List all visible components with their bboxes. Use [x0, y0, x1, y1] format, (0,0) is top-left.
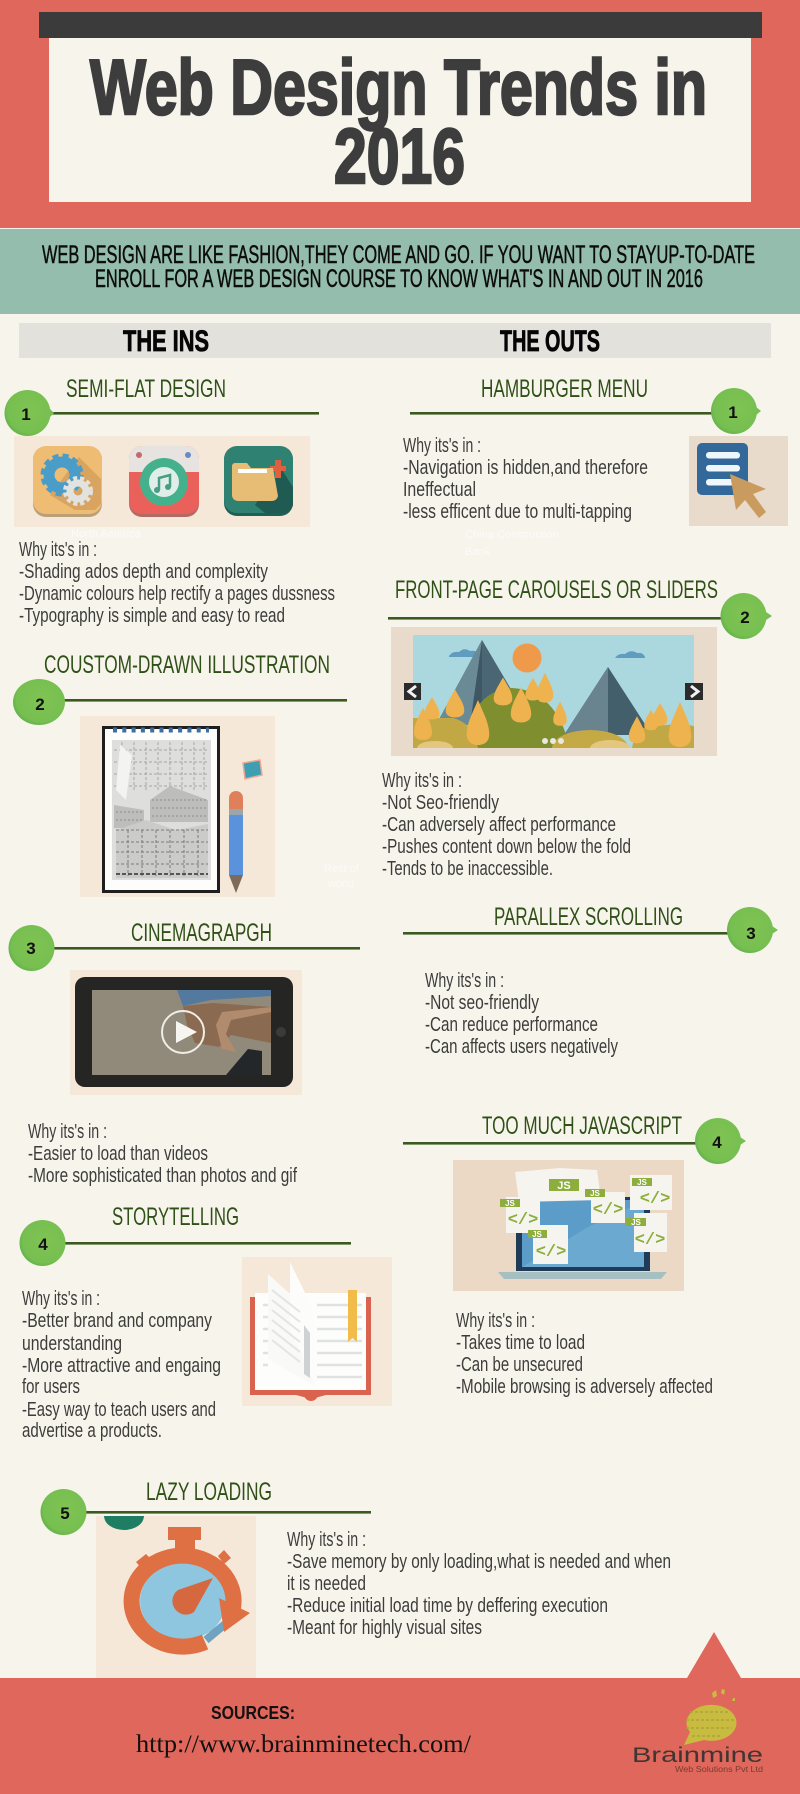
text block: why semi-flat: -Shading ados depth and complexity [19, 560, 269, 583]
text block: why hamburger: -Navigation is hidden,and therefore [403, 456, 648, 479]
text block: why carousels: -Can adversely affect performance [382, 813, 616, 836]
panel: lazy loading [40, 1478, 671, 1678]
panel: semi-flat design: SEMI-FLAT DESIGN [66, 375, 226, 403]
text block: why parallax [425, 969, 619, 1058]
text block: why lazy loading [287, 1528, 671, 1639]
text block: why storytelling: -Better brand and company [22, 1309, 213, 1332]
panel: storytelling: STORYTELLING [112, 1203, 239, 1231]
icons: flat app icons [14, 436, 310, 527]
text block: why carousels: -Pushes content down below the fold [382, 835, 631, 858]
text block: why cinemagraph [28, 1120, 297, 1187]
footer band [0, 1632, 800, 1794]
panel: hamburger menu: 1 [728, 403, 738, 422]
icon: hamburger menu with cursor [689, 436, 788, 526]
panel: lazy loading: LAZY LOADING [146, 1478, 272, 1506]
text block: why semi-flat: Why its's in : [19, 538, 97, 561]
sources heading: SOURCES: [211, 1703, 295, 1723]
intro band [0, 229, 800, 314]
text block: why hamburger [403, 434, 648, 523]
text block: why cinemagraph: -Easier to load than videos [28, 1142, 208, 1165]
text block: why lazy loading: -Reduce initial load time by deffering execution [287, 1594, 608, 1617]
text block: why parallax: Why its's in : [425, 969, 504, 992]
column headers [19, 323, 771, 358]
text block: why semi-flat [19, 538, 335, 627]
text block: why semi-flat: -Typography is simple and easy to read [19, 604, 285, 627]
text block: why javascript [456, 1309, 713, 1398]
illustration: laptop with js files: JS [590, 1189, 601, 1198]
panel: custom-drawn illustration: 2 [35, 695, 45, 714]
illustration: laptop with js files: </> [508, 1211, 538, 1230]
illustration: sketch notebook and pencil [80, 716, 275, 897]
illustration: laptop with js files: JS [631, 1218, 642, 1227]
text block: why cinemagraph: Why its's in : [28, 1120, 107, 1143]
illustration: laptop with js files: JS [505, 1199, 516, 1208]
text block: why hamburger: Why its's in : [403, 434, 481, 457]
illustration: laptop with js files: JS [557, 1180, 571, 1192]
ghost labels: China Construction [465, 529, 559, 541]
panel: semi-flat design [4, 375, 335, 627]
illustration: laptop with js files: JS [532, 1230, 543, 1239]
panel: too much javascript: TOO MUCH JAVASCRIPT [482, 1112, 682, 1140]
text block: why storytelling [22, 1287, 221, 1442]
panel: cinemagraph: 3 [26, 939, 36, 958]
text block: why lazy loading: Why its's in : [287, 1528, 366, 1551]
illustration: open book [242, 1257, 392, 1406]
text block: why storytelling: -More attractive and engaing [22, 1354, 221, 1377]
illustration: laptop with js files: </> [536, 1243, 566, 1262]
text block: why hamburger: -less efficent due to multi-tapping [403, 500, 632, 523]
text block: why carousels: -Tends to be inaccessible. [382, 857, 553, 880]
panel: semi-flat design: 1 [21, 405, 31, 424]
text block: why javascript: -Can be unsecured [456, 1353, 583, 1376]
text block: why storytelling: for users [22, 1375, 80, 1398]
logo: brainmine: Brainmine [632, 1744, 763, 1767]
panel: cinemagraph [8, 919, 360, 1187]
text block: why lazy loading: -Meant for highly visual sites [287, 1616, 482, 1639]
illustration: tablet with video [70, 970, 302, 1095]
panel: parallax scrolling [403, 903, 778, 1058]
panel: front-page carousels [382, 576, 772, 880]
ghost labels [71, 528, 559, 890]
illustration: laptop with js files: </> [640, 1190, 670, 1209]
text block: why lazy loading: it is needed [287, 1572, 366, 1595]
text block: why javascript: -Takes time to load [456, 1331, 585, 1354]
ghost labels: Rest of [324, 863, 360, 875]
illustration: laptop with js files [453, 1160, 684, 1291]
text block: why parallax: -Can reduce performance [425, 1013, 598, 1036]
panel: custom-drawn illustration [13, 651, 347, 897]
text block: why carousels: -Not Seo-friendly [382, 791, 500, 814]
text block: why carousels: Why its's in : [382, 769, 462, 792]
illustration: stopwatch [96, 1516, 256, 1678]
text block: why storytelling: advertise a products. [22, 1419, 162, 1442]
logo: brainmine [632, 1689, 763, 1774]
text block: why storytelling: Why its's in : [22, 1287, 100, 1310]
panel: too much javascript: 4 [712, 1133, 722, 1152]
column headers: THE OUTS [500, 325, 600, 358]
panel: too much javascript [403, 1112, 746, 1398]
panel: parallax scrolling: 3 [746, 924, 756, 943]
panel: hamburger menu [403, 375, 788, 526]
ghost labels: Bank [465, 546, 491, 558]
text block: why cinemagraph: -More sophisticated than photos and gif [28, 1164, 297, 1187]
panel: front-page carousels: 2 [740, 608, 750, 627]
text block: why storytelling: understanding [22, 1332, 122, 1355]
text block: why carousels [382, 769, 631, 880]
illustration: laptop with js files: </> [635, 1231, 665, 1250]
text block: why storytelling: -Easy way to teach users and [22, 1398, 216, 1421]
text block: why javascript: Why its's in : [456, 1309, 535, 1332]
ghost labels: world [327, 878, 354, 890]
logo: brainmine: Web Solutions Pvt Ltd [675, 1765, 763, 1774]
text block: why javascript: -Mobile browsing is adversely affected [456, 1375, 713, 1398]
panel: storytelling [20, 1203, 392, 1442]
illustration: laptop with js files: JS [637, 1178, 648, 1187]
text block: why parallax: -Not seo-friendly [425, 991, 540, 1014]
text block: why parallax: -Can affects users negatively [425, 1035, 619, 1058]
panel: lazy loading: 5 [60, 1504, 70, 1523]
title: 2016 [334, 112, 465, 200]
panel: parallax scrolling: PARALLEX SCROLLING [494, 903, 683, 931]
source url: http://www.brainminetech.com/ [136, 1731, 471, 1758]
illustration: laptop with js files: </> [593, 1201, 623, 1220]
text block: why lazy loading: -Save memory by only loading,what is needed and when [287, 1550, 671, 1573]
text block: why hamburger: Ineffectual [403, 478, 476, 501]
panel: custom-drawn illustration: COUSTOM-DRAWN ILLUSTRATION [44, 651, 330, 679]
panel: cinemagraph: CINEMAGRAPGH [131, 919, 272, 947]
column headers: THE INS [123, 325, 209, 358]
panel: hamburger menu: HAMBURGER MENU [481, 375, 648, 403]
title [90, 43, 707, 200]
header band [0, 0, 800, 228]
text block: why semi-flat: -Dynamic colours help rectify a pages dussness [19, 582, 335, 605]
panel: storytelling: 4 [38, 1235, 48, 1254]
illustration: carousel with mountains [391, 627, 717, 766]
ghost labels: North America [71, 528, 142, 540]
